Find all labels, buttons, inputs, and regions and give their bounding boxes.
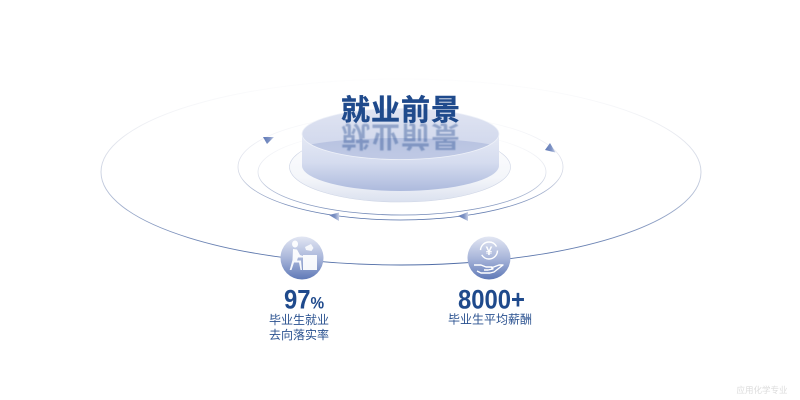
person xyxy=(290,241,303,270)
title: 就业前景 xyxy=(341,94,461,127)
outer orbit ring xyxy=(101,79,701,265)
arrow: upper left xyxy=(263,137,274,144)
icon: hand holding yuan xyxy=(468,236,510,280)
arrow: bottom left xyxy=(329,212,339,221)
cylinder side xyxy=(302,134,499,191)
value: 8000+ xyxy=(458,285,525,315)
open hand xyxy=(474,265,503,273)
speech mark xyxy=(305,244,314,251)
arrow: bottom right xyxy=(458,212,468,221)
yuan sign: ¥ xyxy=(486,244,493,258)
central platform xyxy=(286,108,516,202)
description: 毕业生平均薪酬 xyxy=(448,312,532,326)
icon: graduate at desk xyxy=(280,236,324,280)
description line two: 去向落实率 xyxy=(269,327,329,342)
middle orbit ring xyxy=(238,114,563,220)
watermark: 应用化学专业 xyxy=(736,385,788,395)
inner shaded lens on cylinder top xyxy=(312,138,490,159)
description line one: 毕业生就业 xyxy=(269,313,329,327)
value: 97% xyxy=(284,285,324,315)
cylinder top xyxy=(302,108,499,160)
yuan coin xyxy=(480,242,498,259)
stat: 8000+ xyxy=(448,285,532,326)
inner orbit ring xyxy=(258,129,546,215)
arrow: upper right xyxy=(545,143,556,152)
stat: 97% xyxy=(269,285,329,342)
platform base disc xyxy=(290,132,510,202)
title reflection: 就业前景 xyxy=(341,119,461,152)
cylinder top rim xyxy=(302,108,499,160)
desk xyxy=(303,255,317,270)
